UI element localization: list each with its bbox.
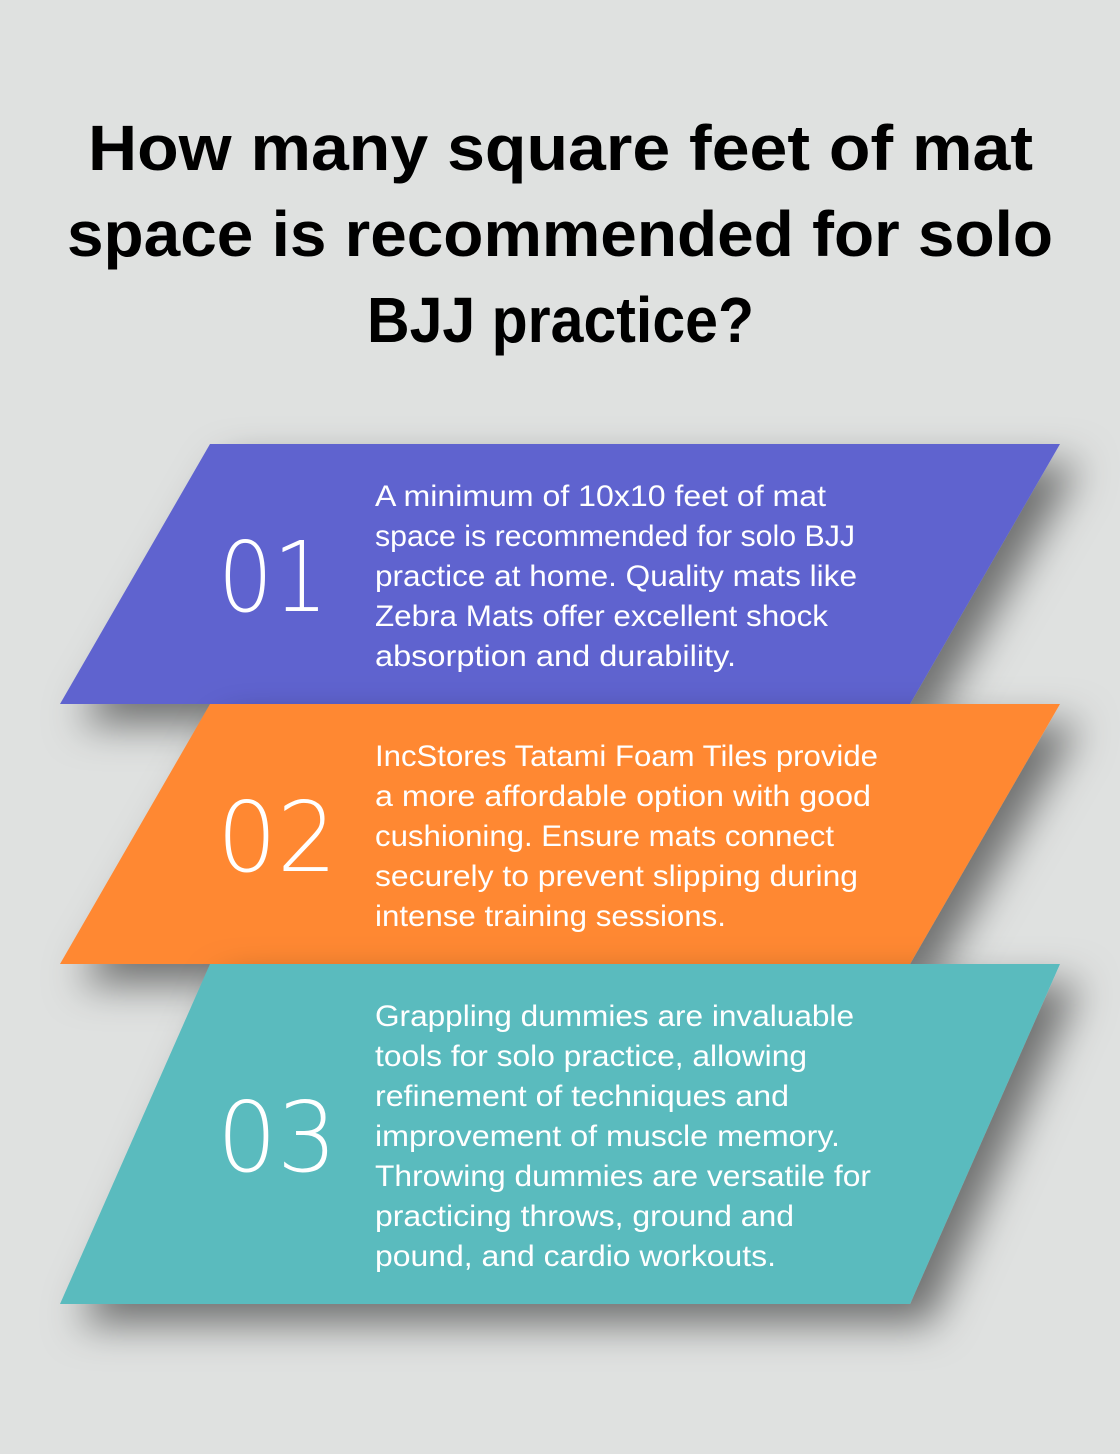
title: How many square feet of mat — [88, 112, 1033, 184]
title: BJJ practice? — [367, 284, 754, 356]
text: step 02 description: IncStores Tatami Foam Tiles provide — [375, 740, 878, 773]
text: step 01 description: A minimum of 10x10 feet of mat — [375, 480, 827, 513]
text: step 02 description: intense training sessions. — [375, 900, 726, 933]
shape: step 03 parallelogram — [60, 964, 1060, 1304]
panel: step 02 — [60, 704, 1060, 964]
number: 01: 01 — [218, 521, 328, 634]
shape: step 02 parallelogram — [60, 704, 1060, 964]
text: step 01 description: Zebra Mats offer excellent shock — [375, 600, 829, 633]
text: step 02 description: securely to prevent slipping during — [375, 860, 858, 893]
text: step 02 description: a more affordable option with good — [375, 780, 871, 813]
text: step 01 description: absorption and durability. — [375, 640, 736, 673]
text: step 03 description: Throwing dummies are versatile for — [375, 1160, 871, 1193]
text: step 03 description — [375, 1000, 871, 1273]
text: step 03 description: improvement of muscle memory. — [375, 1120, 840, 1153]
text: step 01 description: space is recommended for solo BJJ — [375, 520, 855, 553]
text: step 01 description — [375, 480, 857, 673]
text: step 03 description: tools for solo practice, allowing — [375, 1040, 807, 1073]
text: step 03 description: refinement of techniques and — [375, 1080, 789, 1113]
title: space is recommended for solo — [67, 198, 1053, 270]
number: 03: 03 — [217, 1081, 337, 1194]
title — [67, 112, 1053, 356]
text: step 01 description: practice at home. Quality mats like — [375, 560, 857, 593]
text: step 03 description: pound, and cardio workouts. — [375, 1240, 776, 1273]
text: step 03 description: Grappling dummies are invaluable — [375, 1000, 854, 1033]
panel: step 01 — [60, 444, 1060, 704]
number: 02: 02 — [217, 781, 337, 894]
text: step 02 description — [375, 740, 878, 933]
text: step 02 description: cushioning. Ensure mats connect — [375, 820, 835, 853]
shape: step 01 parallelogram — [60, 444, 1060, 704]
text: step 03 description: practicing throws, ground and — [375, 1200, 794, 1233]
panel: step 03 — [60, 964, 1060, 1304]
